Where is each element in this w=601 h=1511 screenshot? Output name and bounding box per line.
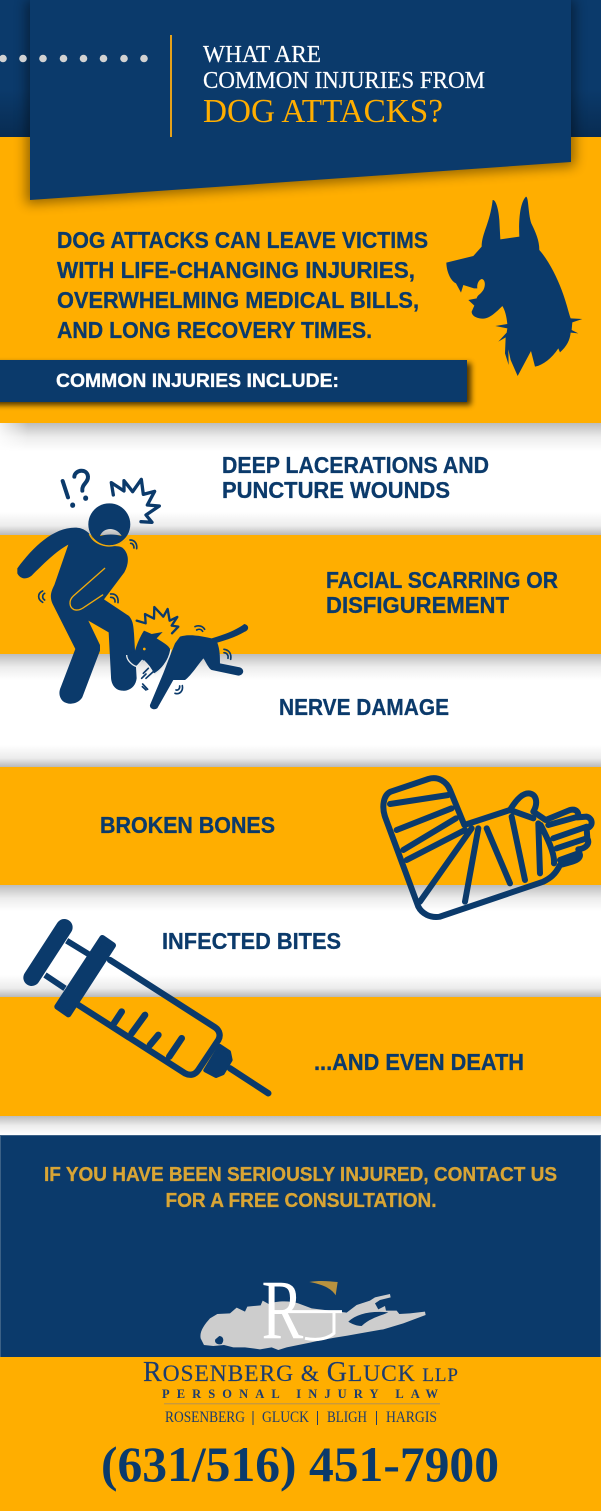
person forearm outline <box>70 568 105 610</box>
header ribbon shadow <box>26 0 575 204</box>
banner: common injuries include <box>0 360 467 402</box>
injury: lacerations: PUNCTURE WOUNDS <box>222 477 450 503</box>
call to action: IF YOU HAVE BEEN SERIOUSLY INJURED, CONTACT US <box>44 1163 557 1186</box>
partner names <box>165 1409 437 1426</box>
banner shadow <box>0 363 471 405</box>
intro text: DOG ATTACKS CAN LEAVE VICTIMS <box>57 227 428 253</box>
call to action <box>44 1163 557 1212</box>
intro text <box>57 227 428 343</box>
dog burst <box>137 607 178 633</box>
needle <box>230 1068 268 1093</box>
tagline: PERSONAL INJURY LAW <box>162 1387 438 1401</box>
injury: infected bites: INFECTED BITES <box>162 928 341 954</box>
logo: island with RG monogram <box>200 1263 426 1357</box>
monogram G gold arc <box>309 1281 338 1295</box>
injury: facial scarring: DISFIGUREMENT <box>326 592 509 618</box>
injury: broken bones: BROKEN BONES <box>100 812 275 838</box>
partner names: ROSENBERG <box>165 1409 245 1426</box>
title: COMMON INJURIES FROM <box>203 68 485 94</box>
footer panel gold <box>0 1357 601 1511</box>
exclamation and question marks <box>63 471 88 505</box>
background bands <box>0 0 601 1135</box>
head outline <box>89 534 130 546</box>
injury: and even death: ...AND EVEN DEATH <box>314 1049 524 1075</box>
icon: dog head silhouette <box>446 197 582 376</box>
icon: dog biting person <box>17 471 248 709</box>
title: DOG ATTACKS? <box>203 93 443 130</box>
dog eye <box>143 648 146 650</box>
dog body <box>150 624 248 709</box>
icon: arm in cast <box>383 778 592 917</box>
header ribbon <box>30 0 571 200</box>
title: WHAT ARE <box>203 42 321 68</box>
intro text: WITH LIFE-CHANGING INJURIES, <box>57 257 415 283</box>
person pain burst <box>111 479 159 522</box>
flange <box>57 938 113 1014</box>
partner names: HARGIS <box>386 1409 437 1426</box>
motion marks <box>39 540 231 694</box>
decorative dots <box>0 55 148 62</box>
dog head outline <box>127 649 171 674</box>
injury: lacerations: DEEP LACERATIONS AND <box>222 452 489 478</box>
intro text: OVERWHELMING MEDICAL BILLS, <box>57 287 419 313</box>
phone number: (631/516) 451-7900 <box>101 1436 499 1492</box>
ticks <box>114 1012 182 1057</box>
partner names: BLIGH <box>327 1409 367 1426</box>
title <box>203 42 485 130</box>
call to action: FOR A FREE CONSULTATION. <box>166 1189 436 1212</box>
icon: syringe <box>32 927 268 1093</box>
person body <box>17 528 137 704</box>
monogram R: R <box>262 1263 304 1357</box>
monogram G stem <box>273 1312 342 1339</box>
plunger <box>32 927 64 978</box>
island map <box>200 1294 426 1350</box>
injury: lacerations <box>222 452 489 503</box>
logo rule <box>164 1403 440 1404</box>
injury: nerve damage: NERVE DAMAGE <box>279 694 449 720</box>
person head <box>88 503 130 545</box>
banner: common injuries include: COMMON INJURIES INCLUDE: <box>56 370 339 392</box>
injury: facial scarring: FACIAL SCARRING OR <box>326 567 558 593</box>
intro text: AND LONG RECOVERY TIMES. <box>57 317 372 343</box>
dog head <box>127 631 170 673</box>
partner names: GLUCK <box>262 1409 309 1426</box>
nozzle <box>205 1046 231 1076</box>
barrel <box>78 960 220 1075</box>
footer panel navy <box>0 1136 600 1358</box>
title rule <box>170 35 172 137</box>
firm name: ROSENBERG & GLUCK LLP <box>143 1357 458 1388</box>
injury: facial scarring <box>326 567 558 618</box>
